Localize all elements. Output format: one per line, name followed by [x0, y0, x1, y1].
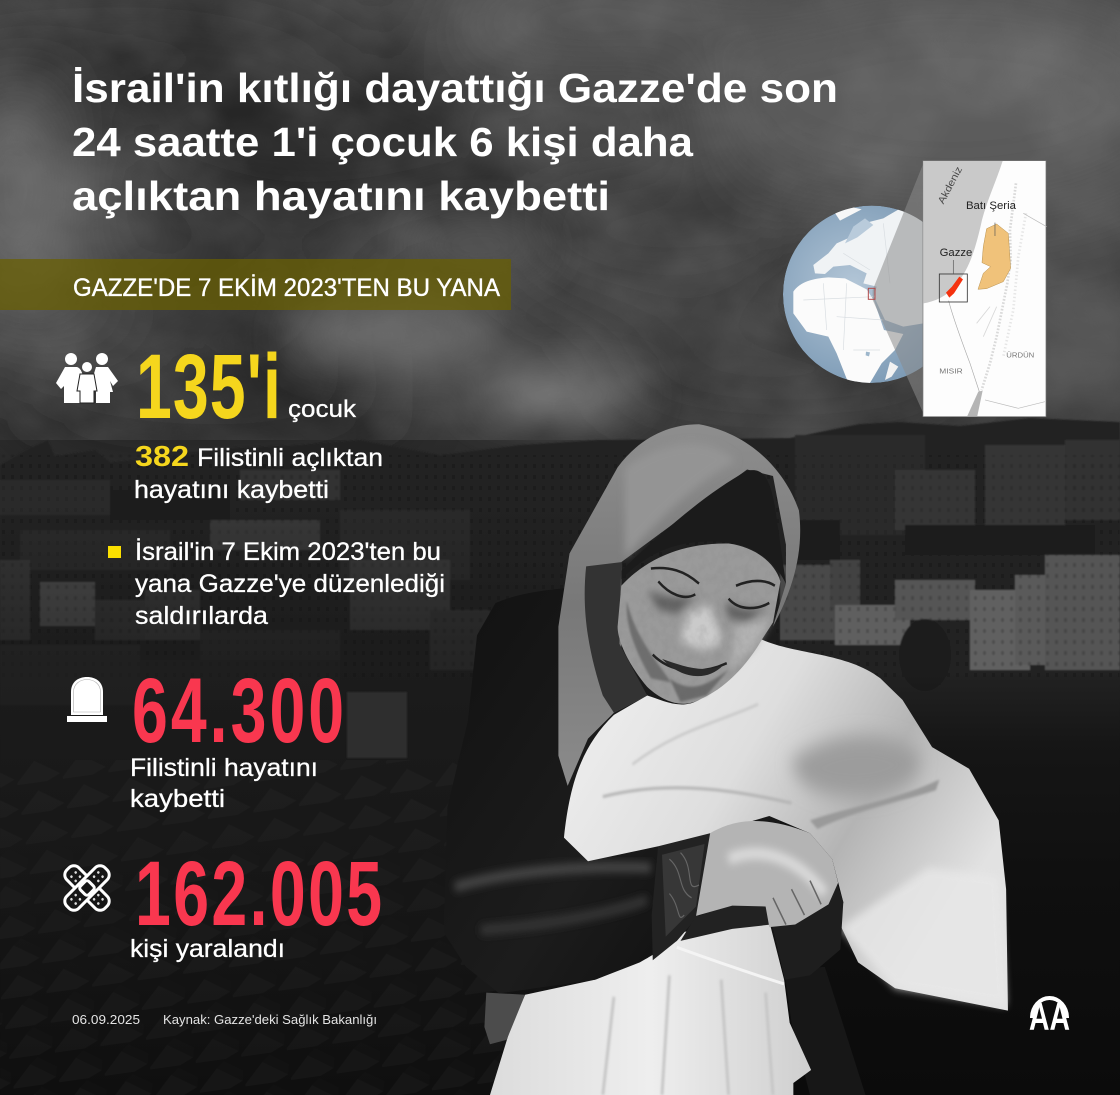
footer: date and source: 06.09.2025 [72, 1013, 140, 1027]
stat: children: 135'i [136, 335, 281, 438]
title: 24 saatte 1'i çocuk 6 kişi daha [72, 119, 694, 165]
facial features [651, 568, 775, 671]
map labels: Akdeniz [936, 165, 965, 206]
logo: Anadolu Agency: AA [1029, 996, 1070, 1039]
locator map [783, 161, 1047, 417]
stat: killed: 64.300 [132, 659, 344, 762]
globe [783, 206, 923, 383]
title: açlıktan hayatını kaybetti [72, 173, 610, 219]
stat: wounded: kişi yaralandı [130, 935, 285, 963]
tree [899, 619, 951, 691]
gulf tip [967, 391, 983, 416]
map labels [936, 165, 1034, 375]
hijab [558, 424, 800, 786]
white shroud [564, 640, 1008, 1011]
stat: famine deaths [134, 441, 383, 504]
map labels: ÜRDÜN [1006, 350, 1034, 359]
stat: children: çocuk [288, 396, 357, 423]
foreground light wreckage block [347, 692, 407, 758]
black under-scarf [621, 470, 786, 584]
foreground dark fade, right [780, 672, 1120, 1095]
footer: date and source: Kaynak: Gazze'deki Sağlık Bakanlığı [163, 1013, 377, 1027]
bullet text: attacks since 7 October: yana Gazze'ye düzenlediği [135, 570, 445, 598]
map labels: Batı Şeria [966, 200, 1016, 212]
bullet text: attacks since 7 October: saldırılarda [135, 602, 268, 630]
continents [793, 277, 903, 383]
map labels: Gazze [940, 247, 972, 259]
Gaza box [939, 274, 967, 302]
stat: killed: Filistinli hayatını [130, 754, 318, 782]
dark robe skirt [784, 967, 866, 1095]
photo: grieving woman embracing shrouded child [444, 424, 1008, 1095]
relief and borders [982, 183, 1016, 390]
white dress [490, 922, 811, 1095]
inset map panel [923, 161, 1047, 417]
projection cone [873, 163, 923, 413]
title [72, 65, 838, 219]
Gaza strip [946, 277, 963, 298]
subtitle band [0, 259, 511, 310]
globe location marker [868, 288, 875, 299]
face [618, 544, 780, 704]
refugee tents [0, 760, 620, 1095]
black sleeve [444, 588, 710, 993]
icon: family [56, 353, 118, 403]
bullet text: attacks since 7 October: İsrail'in 7 Ekim 2023'ten bu [135, 537, 441, 566]
foreground dark fade, left [0, 500, 780, 1095]
stat: killed: kaybetti [130, 785, 225, 813]
West Bank [978, 224, 1011, 289]
skyline blocks [0, 418, 1120, 1095]
stat: killed [130, 659, 344, 813]
stat: children [136, 335, 357, 438]
map labels: MISIR [939, 366, 963, 375]
skin texture [687, 612, 706, 643]
stat: wounded: 162.005 [135, 842, 382, 945]
icon: tombstone [67, 677, 107, 722]
title: İsrail'in kıtlığı dayattığı Gazze'de son [72, 65, 838, 111]
stat: famine deaths: Filistinli açlıktan [197, 444, 383, 472]
footer: date and source [72, 1013, 377, 1027]
sea [923, 161, 1003, 303]
dark hand backing [771, 868, 843, 980]
subtitle band: GAZZE'DE 7 EKİM 2023'TEN BU YANA [73, 273, 500, 302]
stat: famine deaths: 382 [135, 441, 189, 473]
embroidered cuff [652, 831, 710, 960]
bullet text: attacks since 7 October [108, 537, 445, 630]
icon: crossed bandages [49, 850, 125, 926]
stat: famine deaths: hayatını kaybetti [134, 476, 329, 504]
forearm and hand [696, 821, 838, 927]
